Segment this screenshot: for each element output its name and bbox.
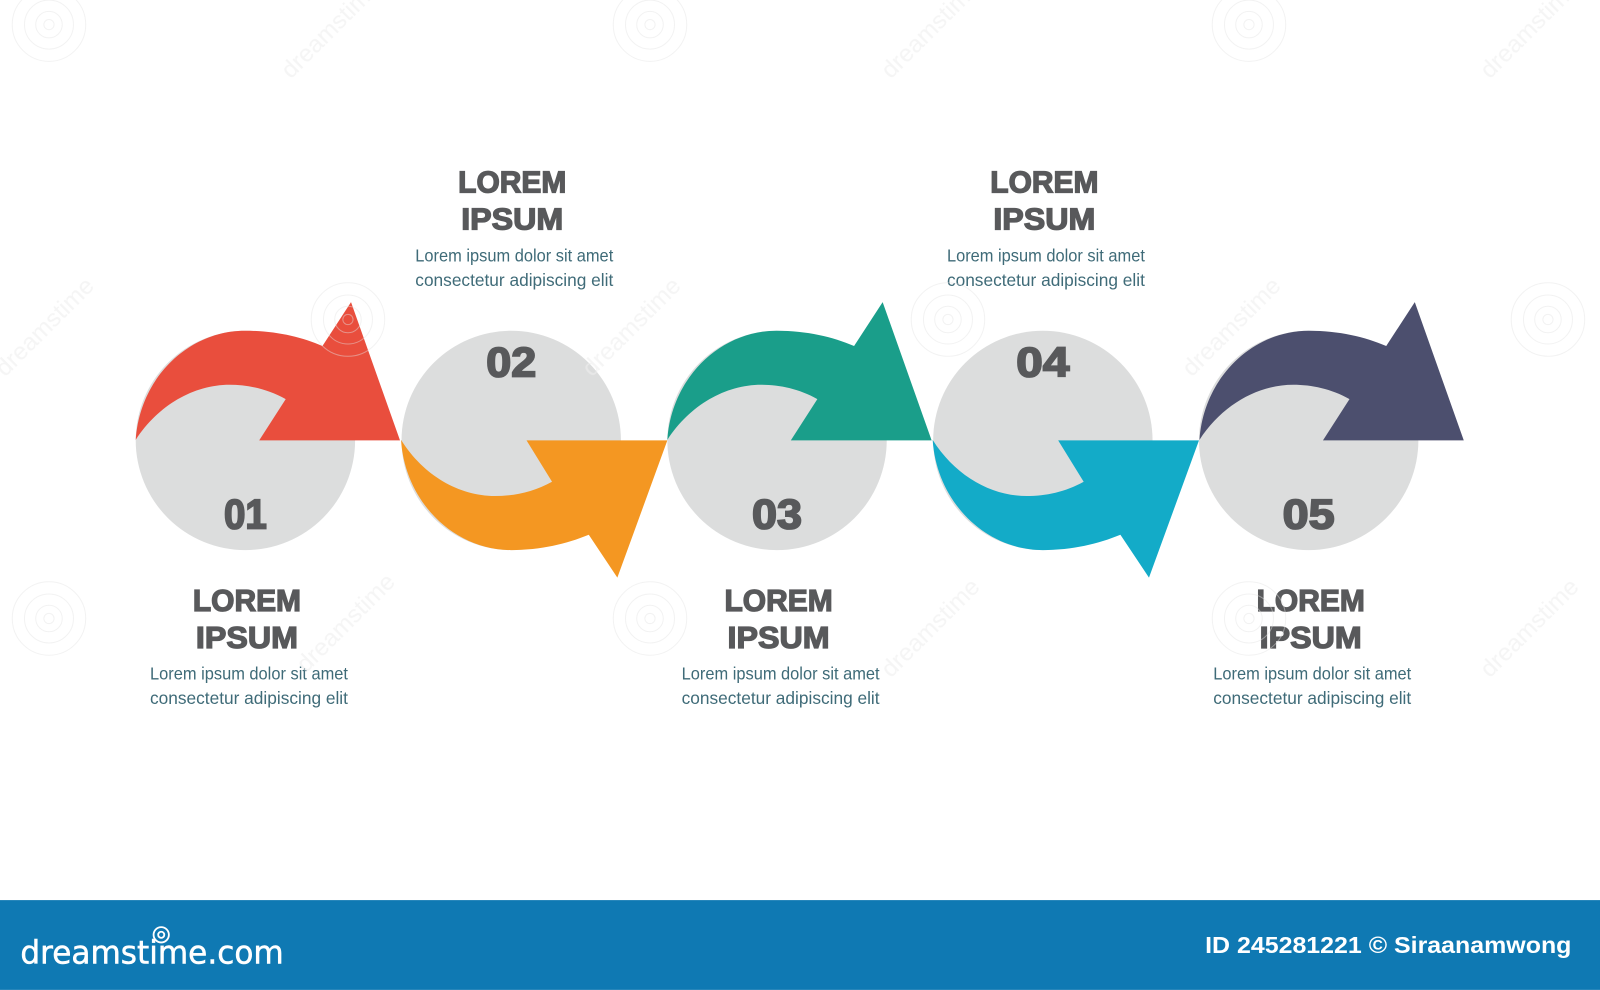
red arrow — [136, 302, 400, 440]
text block 4: IPSUM — [993, 203, 1095, 237]
step 4: circle, arrow and number — [933, 331, 1199, 578]
circle 4 — [933, 331, 1153, 550]
text block 5 — [1213, 584, 1411, 708]
infographic canvas: dreamstime — [291, 568, 401, 678]
text block 1 — [150, 584, 348, 708]
text block 4 — [947, 165, 1145, 290]
text block 5: LOREM — [1257, 584, 1365, 618]
text block 2: IPSUM — [461, 203, 563, 237]
circle 3 — [667, 331, 887, 550]
text block 2: LOREM — [458, 165, 566, 199]
credit line: ID 245281221 © Siraanamwong — [1205, 932, 1571, 958]
footer bar — [0, 900, 1600, 990]
text block 5: Lorem ipsum dolor sit amet — [1213, 664, 1411, 684]
text block 2: consectetur adipiscing elit — [415, 270, 613, 290]
text block 4: LOREM — [990, 165, 1098, 199]
text block 3: Lorem ipsum dolor sit amet — [682, 664, 880, 684]
number 03: 03 — [752, 491, 802, 538]
text block 3: consectetur adipiscing elit — [682, 688, 880, 708]
number 02: 02 — [486, 339, 536, 386]
step 1: circle, arrow and number — [136, 302, 400, 550]
orange arrow — [401, 440, 667, 578]
circle 5 — [1199, 331, 1418, 550]
text block 3: LOREM — [724, 584, 833, 618]
text block 3 — [682, 584, 880, 708]
number 01: 01 — [224, 491, 267, 538]
number 05: 05 — [1283, 491, 1335, 538]
infographic canvas: dreamstime — [1475, 573, 1584, 683]
text block 1: IPSUM — [196, 621, 298, 655]
text block 1: Lorem ipsum dolor sit amet — [150, 664, 348, 684]
circle 1 — [136, 331, 355, 550]
infographic canvas: dreamstime — [876, 573, 985, 683]
infographic canvas: dreamstime — [1177, 272, 1286, 382]
step 2: circle, arrow and number — [401, 331, 667, 578]
teal arrow — [667, 302, 932, 440]
text block 5: IPSUM — [1260, 621, 1362, 655]
circle 2 — [402, 331, 621, 550]
text block 5: consectetur adipiscing elit — [1213, 688, 1411, 708]
text block 3: IPSUM — [728, 621, 830, 655]
navy arrow — [1199, 302, 1464, 440]
text block 1: consectetur adipiscing elit — [150, 688, 348, 708]
step 3: circle, arrow and number — [667, 302, 932, 550]
text block 1: LOREM — [193, 584, 301, 618]
text block 4: consectetur adipiscing elit — [947, 270, 1145, 290]
number 04: 04 — [1016, 339, 1070, 386]
cyan arrow — [933, 440, 1199, 578]
text block 2: Lorem ipsum dolor sit amet — [415, 245, 613, 265]
text block 4: Lorem ipsum dolor sit amet — [947, 245, 1145, 265]
icon: logo spiral — [154, 927, 169, 942]
step 5: circle, arrow and number — [1199, 302, 1464, 550]
text block 2 — [415, 165, 613, 290]
infographic canvas: dreamstime — [577, 272, 686, 382]
logo wordmark: dreamstime.com — [20, 935, 284, 971]
